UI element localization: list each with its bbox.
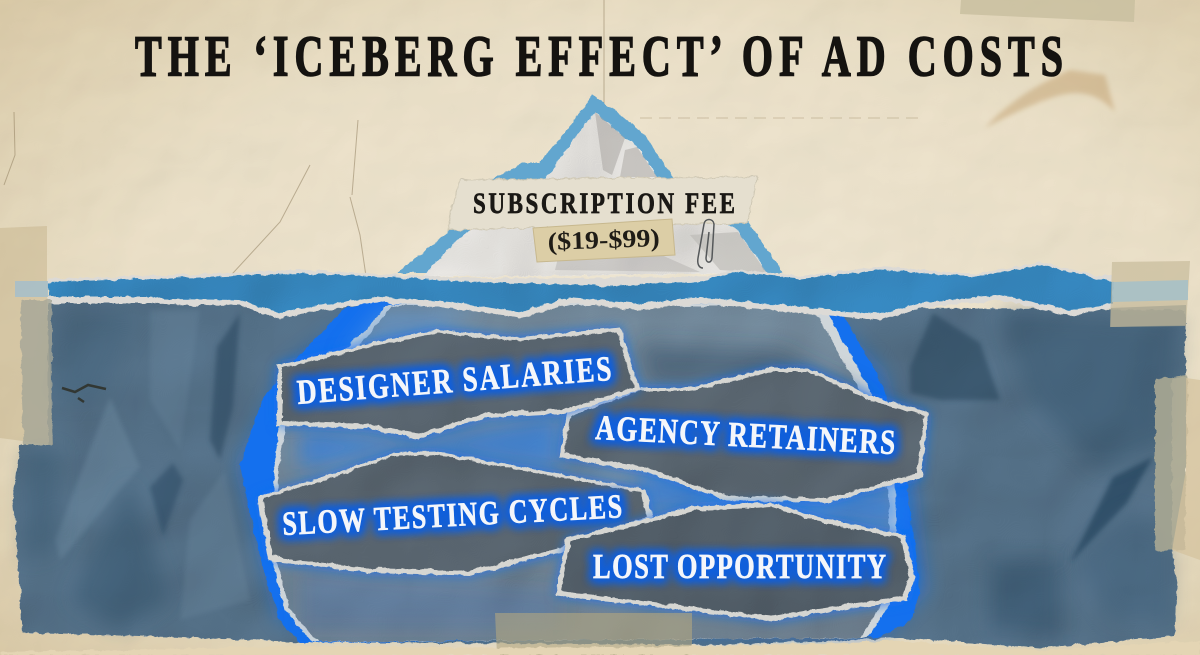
label text: SUBSCRIPTION FEE	[473, 186, 735, 220]
tape: bottom	[495, 613, 692, 655]
price tag	[533, 219, 675, 262]
upper torn white edge	[48, 262, 1112, 296]
torn strip: agency retainers	[560, 368, 928, 502]
tape: right side	[1155, 376, 1188, 551]
tape label	[448, 177, 758, 230]
ink smudge	[62, 385, 106, 402]
tape: left	[0, 226, 53, 445]
outer glow	[240, 300, 925, 637]
blue water strip	[48, 265, 1114, 314]
label: lost opportunity: LOST OPPORTUNITY	[593, 548, 886, 586]
iceberg blue backing	[397, 95, 783, 273]
label: slow testing cycles: SLOW TESTING CYCLES	[281, 487, 623, 543]
label: designer salaries: DESIGNER SALARIES	[296, 349, 613, 412]
tape: right top	[1110, 261, 1190, 327]
iceberg white paper	[423, 112, 767, 277]
torn white edge	[272, 304, 898, 642]
iceberg grey paper	[276, 306, 891, 642]
torn strip: designer salaries	[278, 328, 639, 438]
tape: top right	[960, 0, 1135, 22]
inner blue light patches	[300, 310, 900, 630]
torn strip: lost opportunity	[556, 503, 914, 620]
lower torn white edge	[48, 275, 1112, 320]
electric blue halo	[240, 300, 920, 643]
icon: paperclip	[698, 220, 714, 268]
water crease facets	[25, 310, 1180, 635]
bottom torn paper edge	[0, 640, 1200, 655]
label: agency retainers: AGENCY RETAINERS	[595, 408, 896, 462]
torn strip: slow testing cycles	[258, 452, 652, 575]
title: THE ‘ICEBERG EFFECT’ OF AD COSTS	[135, 23, 1063, 88]
subscription fee label	[448, 177, 758, 268]
underwater paper	[13, 302, 1185, 648]
iceberg tip above water	[397, 95, 783, 277]
submerged iceberg	[240, 300, 925, 643]
water surface band	[48, 262, 1114, 320]
price text: ($19-$99)	[547, 224, 660, 256]
